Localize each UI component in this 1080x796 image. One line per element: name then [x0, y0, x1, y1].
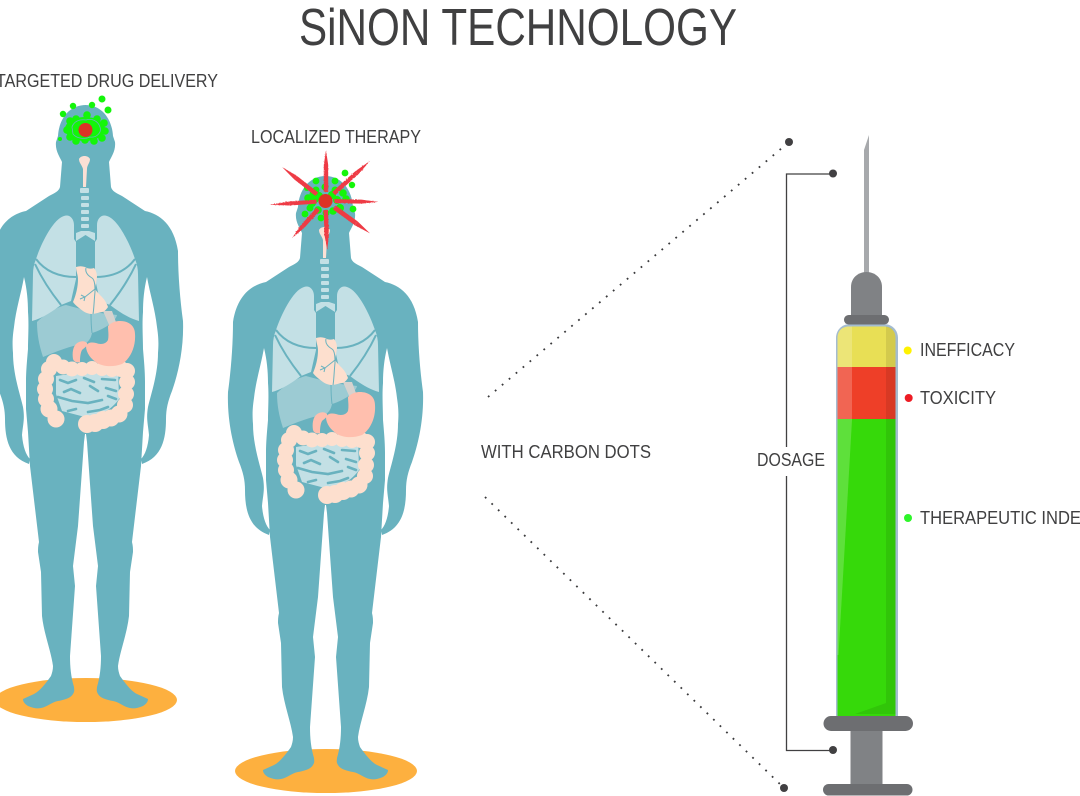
title: SiNON TECHNOLOGY: [299, 0, 737, 57]
green zone: therapeutic index: [838, 419, 896, 716]
heading: localized therapy: LOCALIZED THERAPY: [251, 127, 421, 147]
label: with carbon dots: WITH CARBON DOTS: [481, 442, 651, 462]
syringe: [823, 135, 913, 796]
heading: targeted drug delivery: TARGETED DRUG DELIVERY: [0, 71, 218, 91]
legend: inefficacy: INEFFICACY: [920, 340, 1015, 360]
floor ellipse: [0, 678, 177, 722]
carbon dots around tumour: [302, 170, 356, 221]
carbon dots around tumour: [58, 96, 112, 145]
tumour: [318, 194, 332, 208]
floor ellipse: [235, 749, 417, 793]
figure: targeted drug delivery: [0, 96, 183, 722]
dotted zoom line: lower: [485, 497, 784, 788]
barrel highlight: [838, 326, 852, 655]
anchor dot: lower: [780, 784, 788, 792]
barrel shadow: [855, 326, 896, 714]
plunger thumb rest: [823, 784, 912, 796]
tumour: [78, 123, 92, 137]
brain outline: [72, 119, 100, 138]
yellow zone: inefficacy: [838, 326, 896, 367]
label: dosage: DOSAGE: [757, 450, 825, 470]
legend: toxicity: TOXICITY: [920, 388, 996, 408]
figure: localized therapy: [228, 150, 423, 793]
human body with organs: [228, 176, 423, 779]
needle hub: [851, 272, 882, 318]
plunger rod: [850, 731, 882, 785]
barrel: [836, 324, 898, 717]
dosage bracket: [786, 170, 837, 754]
red zone: toxicity: [838, 367, 896, 419]
lower flange: [824, 716, 913, 731]
red burst spikes: [269, 150, 379, 250]
dotted zoom line: upper: [488, 142, 789, 397]
human body with organs: [0, 105, 183, 708]
needle: [864, 135, 869, 274]
upper flange: [844, 315, 889, 324]
anchor dot: upper: [785, 138, 793, 146]
